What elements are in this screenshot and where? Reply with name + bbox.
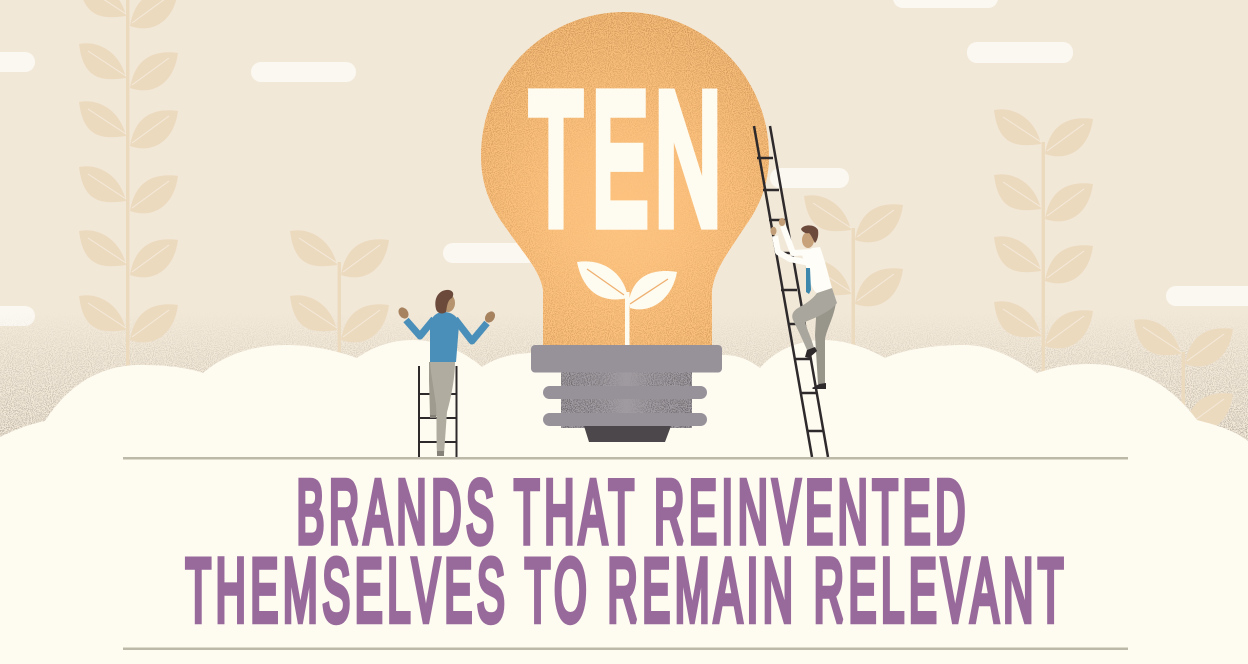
- plant: behind ladder: [804, 195, 903, 348]
- thread band upper: [543, 386, 707, 399]
- hair: [801, 225, 818, 243]
- shirt arms: [775, 226, 814, 263]
- word TEN: N: [655, 56, 721, 261]
- boots: [430, 415, 444, 456]
- short ladder: [419, 366, 456, 457]
- plant: tall right: [994, 109, 1093, 372]
- torso: [430, 312, 459, 362]
- plant: far right: [1134, 319, 1233, 431]
- word TEN: E: [593, 58, 647, 262]
- shoes: [805, 347, 826, 389]
- arms: [406, 319, 487, 341]
- socket cap: [531, 345, 722, 372]
- hair: [435, 290, 453, 313]
- thread band lower: [543, 413, 707, 426]
- plant: tall left: [79, 0, 178, 368]
- person on short ladder: [396, 290, 497, 456]
- top rule: [123, 457, 1128, 460]
- head: [802, 232, 814, 248]
- screw threads: [561, 372, 692, 428]
- man climbing ladder: [770, 218, 837, 389]
- back leg: [429, 362, 440, 416]
- tie: [806, 268, 811, 294]
- white pill clouds: [0, 0, 1248, 326]
- bulb glass: [481, 12, 769, 347]
- word TEN: T: [530, 58, 582, 262]
- back leg: [815, 300, 836, 384]
- front leg: [792, 288, 837, 350]
- word TEN: [530, 56, 721, 262]
- bulb tip: [584, 426, 671, 442]
- tall ladder: [754, 126, 828, 457]
- bulb grain: [481, 12, 769, 347]
- grainy haze above clouds: [0, 312, 1248, 442]
- cream cloud bank: [0, 340, 1248, 664]
- hands: [396, 306, 411, 320]
- hands: [779, 218, 785, 226]
- shirt torso: [802, 247, 832, 293]
- head: [441, 294, 455, 312]
- plant: short left: [290, 230, 389, 354]
- title: [186, 462, 1063, 640]
- bottom rule: [123, 648, 1128, 650]
- front leg: [430, 362, 455, 454]
- title: THEMSELVES TO REMAIN RELEVANT: [186, 540, 1063, 640]
- title: BRANDS THAT REINVENTED: [296, 462, 965, 562]
- light bulb: [481, 12, 769, 442]
- sprout icon: [577, 261, 677, 346]
